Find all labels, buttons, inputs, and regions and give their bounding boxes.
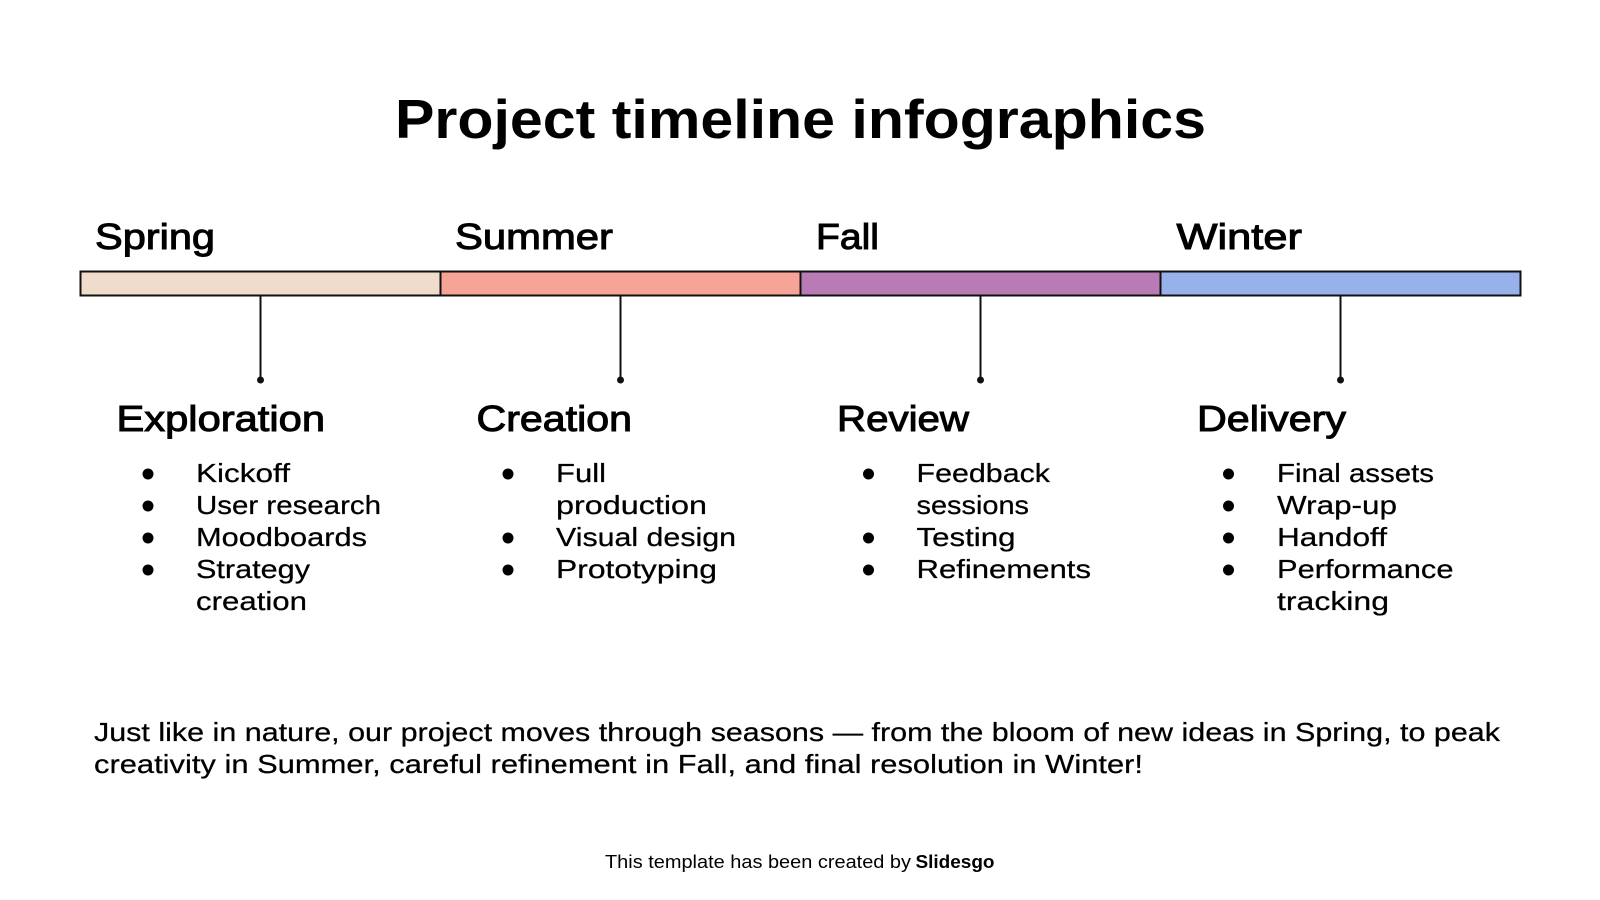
bullet list: Feedback (916, 458, 1051, 488)
connectors (258, 296, 1343, 382)
bullet list: Kickoff (196, 458, 291, 488)
bullet list: Wrap-up (1277, 490, 1397, 520)
footer credit: Slidesgo (916, 852, 995, 872)
bullet list: Testing (916, 522, 1016, 552)
bullet list: production (556, 490, 707, 520)
footer credit: This template has been created by (605, 852, 911, 872)
bullet list: User research (196, 490, 381, 520)
season labels (95, 216, 1302, 257)
bullet list (142, 458, 381, 616)
bullet list: Handoff (1277, 522, 1388, 552)
bullet list: sessions (916, 490, 1029, 520)
title: Project timeline infographics (395, 88, 1206, 150)
segment: Summer (440, 272, 800, 296)
bullet list: tracking (1277, 586, 1389, 616)
segment: Winter (1160, 272, 1520, 296)
bullet list: Performance (1277, 554, 1454, 584)
segment: Spring (80, 272, 440, 296)
heading: Exploration (116, 398, 325, 439)
bullet list (1223, 458, 1454, 616)
segment: Fall (800, 272, 1160, 296)
panel: Creation (476, 398, 736, 584)
summary paragraph (94, 717, 1501, 779)
label: Spring: Spring (95, 216, 215, 257)
timeline bar (80, 272, 1520, 296)
connector: Creation (618, 296, 623, 382)
panel: Exploration (116, 398, 381, 616)
label: Summer: Summer (455, 216, 613, 257)
summary paragraph: Just like in nature, our project moves through seasons — from the bloom of new ideas in Spring, to peak (94, 717, 1501, 747)
bullet list: Visual design (556, 522, 736, 552)
bullet list: Strategy (196, 554, 310, 584)
label: Fall: Fall (816, 216, 879, 257)
bullet list (502, 458, 736, 584)
heading: Creation (476, 398, 632, 439)
panel: Delivery (1197, 398, 1454, 616)
bullet list (863, 458, 1091, 584)
bullet list: Final assets (1277, 458, 1434, 488)
bullet list: Prototyping (556, 554, 717, 584)
connector: Review (978, 296, 983, 382)
summary paragraph: creativity in Summer, careful refinement in Fall, and final resolution in Winter! (94, 749, 1143, 779)
panel: Review (837, 398, 1091, 584)
bullet list: Refinements (916, 554, 1091, 584)
connector: Delivery (1338, 296, 1343, 382)
bullet list: creation (196, 586, 307, 616)
connector: Exploration (258, 296, 263, 382)
heading: Delivery (1197, 398, 1346, 439)
bullet list: Moodboards (196, 522, 367, 552)
heading: Review (837, 398, 970, 439)
bullet list: Full (556, 458, 606, 488)
label: Winter: Winter (1176, 216, 1302, 257)
